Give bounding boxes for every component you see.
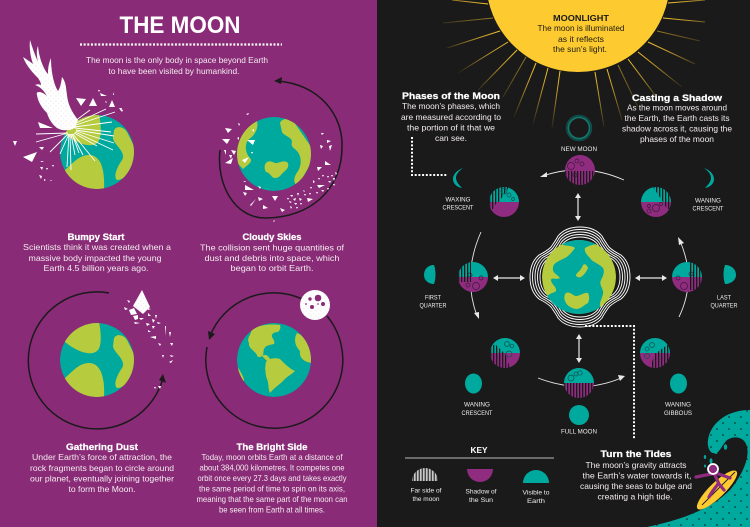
text: bumpy start: massive body impacted the young — [28, 253, 162, 263]
text: bumpy start: Earth 4.5 billion years ago. — [44, 263, 148, 273]
key: far side label: Far side of — [410, 488, 442, 494]
arrow: bright side orbit — [206, 293, 343, 428]
text: casting a shadow: As the moon moves around — [627, 102, 727, 112]
text: the bright side: about 384,000 kilometres. It competes one — [200, 462, 345, 472]
heading: cloudy skies: Cloudy Skies — [242, 232, 302, 243]
panel: dark background — [377, 0, 750, 527]
arrow: bottom orbit — [538, 375, 625, 386]
text: moonlight: as it reflects — [558, 34, 604, 44]
illustration: central earth — [542, 240, 616, 314]
text: casting a shadow: phases of the moon — [640, 134, 714, 144]
moon phase: left — [458, 262, 488, 292]
label: waning gibbous: WANING — [665, 402, 691, 408]
text: gathering dust: to form the Moon. — [68, 484, 136, 494]
key: shadow label: Shadow of — [466, 488, 497, 496]
dotted line: phases callout — [412, 137, 447, 175]
illustration: bumpy start earth — [60, 115, 134, 189]
label: last quarter — [710, 294, 738, 310]
icon: new moon ring — [567, 116, 591, 140]
icon: waning crescent oval — [465, 374, 482, 394]
text: turn the tides: The moon’s gravity attracts — [586, 460, 686, 470]
heading: bumpy start: Bumpy Start — [68, 232, 125, 243]
arrow: double right — [635, 275, 667, 281]
illustration: bright side earth with americas — [234, 323, 312, 397]
icon: moon — [300, 290, 330, 320]
label: waning gibbous — [664, 402, 693, 417]
panel: purple background — [0, 0, 377, 527]
arrow: left orbit — [470, 232, 481, 319]
label: waning crescent lower — [462, 402, 492, 417]
illustration: cloudy skies earth — [237, 117, 311, 191]
key: visible label: Visible to — [522, 490, 550, 496]
heading: phases of the moon: Phases of the Moon — [402, 91, 500, 102]
text: bumpy start: Scientists think it was created when a — [23, 242, 171, 252]
text: the bright side: orbit once every 27.3 days and takes exactly — [198, 473, 347, 483]
title: THE MOON — [120, 12, 240, 39]
text: moonlight: the sun’s light. — [553, 44, 607, 54]
label: full moon: FULL MOON — [561, 428, 597, 436]
label: waning crescent: WANING — [695, 198, 721, 204]
heading: moonlight: MOONLIGHT — [553, 14, 609, 23]
arrow: top orbit — [540, 170, 624, 180]
icon: waning crescent — [704, 168, 714, 188]
key: far side label: the moon — [412, 496, 440, 503]
text: turn the tides: causing the seas to bulge and — [580, 481, 692, 491]
label: waxing crescent — [442, 196, 474, 212]
icon: tidal rings around earth — [530, 227, 630, 327]
text: moonlight: The moon is illuminated — [538, 23, 625, 33]
label: first quarter: FIRST — [425, 294, 441, 302]
label: last quarter: QUARTER — [710, 302, 738, 310]
arrow: cloudy skies spiral orbit — [219, 77, 342, 218]
moon phase: bottom right — [640, 338, 670, 368]
text: cloudy skies: dust and debris into space, which — [204, 253, 340, 263]
icon: last quarter — [724, 265, 736, 284]
key: far side swatch — [412, 468, 438, 481]
label: first quarter — [420, 294, 447, 310]
moon phase: bottom — [564, 368, 594, 398]
moon phase: new moon position — [565, 155, 595, 185]
heading: the bright side: The Bright Side — [236, 442, 308, 453]
icon: impact debris — [13, 90, 123, 181]
intro text: The moon is the only body in space beyond Earth — [86, 55, 268, 65]
text: casting a shadow — [622, 102, 732, 144]
moon phase: top left — [489, 187, 519, 217]
text: the bright side: be seen from Earth at all times. — [219, 504, 325, 514]
heading: turn the tides: Turn the Tides — [600, 449, 672, 460]
label: waning crescent — [692, 198, 724, 212]
intro text — [86, 55, 268, 76]
icon: meteor flame — [23, 40, 78, 130]
arrow: double top — [575, 193, 581, 221]
title dotted underline — [80, 43, 282, 46]
text: gathering dust: our planet, eventually joining together — [30, 474, 174, 484]
text: cloudy skies: began to orbit Earth. — [230, 263, 314, 273]
text: bumpy start — [23, 242, 171, 273]
text: gathering dust — [30, 452, 174, 494]
moon phase: bottom left — [490, 338, 520, 368]
label: waning crescent lower: CRESCENT — [462, 410, 492, 417]
text: casting a shadow: the Earth, the Earth casts its — [624, 113, 730, 123]
text: cloudy skies — [200, 242, 345, 273]
icon: surfer on surfboard — [692, 464, 742, 514]
text: the bright side: the same period of time to spin on its axis, — [199, 484, 345, 494]
key: shadow swatch — [467, 469, 493, 482]
text: turn the tides — [580, 460, 692, 502]
intro text: to have been visited by humankind. — [108, 66, 240, 76]
icon: full moon — [569, 405, 589, 425]
illustration: gathering dust earth — [60, 323, 134, 397]
text: phases of the moon: The moon’s phases, which — [402, 101, 500, 111]
text: casting a shadow: shadow across it, causing the — [622, 124, 732, 134]
label: new moon: NEW MOON — [561, 146, 597, 153]
moon phase: right — [672, 262, 702, 292]
key: visible swatch — [523, 470, 549, 483]
label: first quarter: QUARTER — [420, 302, 447, 310]
moon phase: top right — [641, 187, 671, 217]
arrow: double bottom — [576, 334, 582, 363]
arrow: gathering dust orbit — [28, 292, 166, 429]
heading: gathering dust: Gathering Dust — [66, 442, 139, 453]
text: gathering dust: Under Earth’s force of attraction, the — [32, 452, 172, 462]
illustration: wave — [647, 410, 750, 527]
arrow: double left — [493, 275, 525, 281]
text: the bright side — [196, 452, 348, 514]
text: cloudy skies: The collision sent huge quantities of — [200, 242, 345, 252]
key — [405, 446, 554, 505]
heading: casting a shadow: Casting a Shadow — [632, 93, 723, 104]
icon: impact rays — [36, 109, 115, 170]
text: phases of the moon: can see. — [435, 133, 467, 143]
icon: first quarter — [424, 265, 436, 284]
arrow: right orbit — [678, 237, 688, 317]
text: gathering dust: rock fragments began to circle around — [30, 463, 174, 473]
text: phases of the moon — [401, 101, 501, 143]
text: moonlight — [538, 23, 625, 54]
icon: sun — [486, 0, 670, 72]
text: the bright side: Today, moon orbits Earth at a distance of — [202, 452, 343, 462]
label: waning gibbous: GIBBOUS — [664, 410, 693, 417]
icon: gathering dust debris — [124, 290, 174, 389]
label: last quarter: LAST — [717, 294, 731, 302]
key: far side label — [410, 488, 442, 503]
label: waning crescent lower: WANING — [464, 402, 490, 408]
icon: water drops — [704, 444, 727, 468]
key: shadow label: the Sun — [469, 497, 493, 504]
key: shadow label — [466, 488, 497, 504]
key heading: KEY — [470, 446, 488, 455]
text: the bright side: meaning that the same part of the moon can — [196, 494, 348, 504]
icon: sun rays — [443, 0, 705, 128]
text: turn the tides: creating a high tide. — [598, 492, 672, 502]
icon: waxing crescent — [453, 168, 463, 188]
key: visible label: Earth — [527, 498, 545, 505]
label: waxing crescent: WAXING — [446, 196, 470, 204]
text: phases of the moon: the portion of it that we — [407, 122, 495, 132]
dotted line: tides callout — [585, 326, 634, 439]
icon: cloudy skies debris — [222, 113, 337, 222]
label: waxing crescent: CRESCENT — [442, 204, 474, 212]
text: phases of the moon: are measured according to — [401, 112, 501, 122]
text: turn the tides: the Earth’s water towards it, — [582, 470, 692, 480]
key: visible label — [522, 490, 550, 505]
icon: waning gibbous oval — [670, 374, 687, 394]
label: waning crescent: CRESCENT — [692, 206, 724, 212]
